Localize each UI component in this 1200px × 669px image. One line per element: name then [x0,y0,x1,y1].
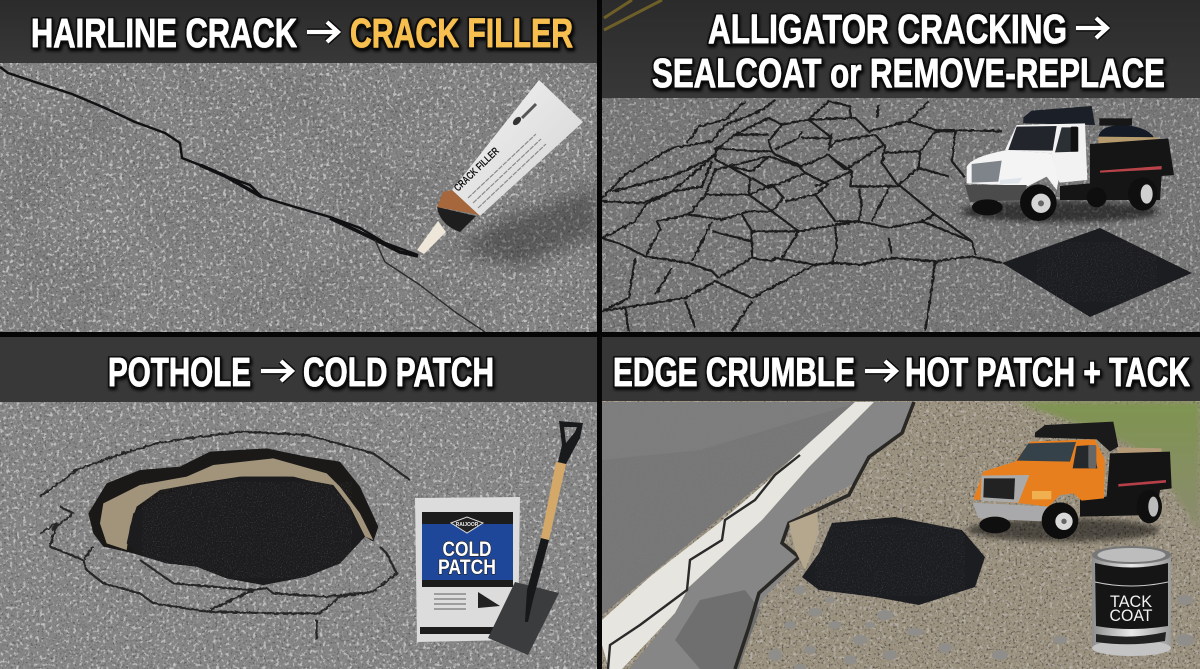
icon: tack coat can [1092,546,1171,656]
asphalt patch [1002,228,1192,317]
icon: tack coat can: COAT [1110,607,1152,625]
title: alligator cracking: ALLIGATOR CRACKING [708,6,1067,52]
pothole [40,432,410,640]
title: hairline crack: HAIRLINE CRACK [31,10,297,56]
title: pothole: POTHOLE [108,349,251,395]
bag label: COLD [442,538,492,561]
heading band [0,0,597,63]
icon: cold patch bag: PATCH [438,556,496,579]
panel: pothole [0,337,597,669]
icon: shovel [488,421,583,655]
gravel stones [768,586,1194,669]
tube shadow [455,190,597,268]
white edge line [602,402,874,669]
icon: cold patch bag: RAIJOOR [456,522,479,528]
title: crack filler: CRACK FILLER [350,10,573,56]
icon: crack filler tube [417,80,583,254]
asphalt surface [0,402,597,669]
crumbling road edge [629,402,914,669]
shoulder gravel [602,401,1200,669]
tube label: CRACK FILLER [452,145,502,194]
asphalt surface [602,98,1200,332]
arrow [307,22,338,42]
icon: white dump truck [960,106,1174,222]
icon: orange dump truck [967,422,1172,542]
road centre markings [604,0,662,30]
title: cold patch: COLD PATCH [303,349,494,395]
arrow [865,361,896,381]
arrow [1076,18,1107,38]
alligator crack network [602,100,1002,331]
heading band [0,337,597,402]
arrow [261,361,292,381]
panel: edge crumble [602,337,1200,669]
panel: hairline crack [0,0,597,332]
asphalt surface [0,63,597,332]
can label: TACK [1110,593,1152,611]
hot patch [802,517,985,605]
title: edge crumble: EDGE CRUMBLE [613,349,855,395]
road surface [602,402,860,615]
icon: cold patch bag [415,497,520,642]
hairline crack line [0,67,485,332]
heading band [602,337,1200,401]
panel: alligator cracking [602,0,1200,332]
heading band [602,0,1200,98]
grass [1015,402,1200,535]
